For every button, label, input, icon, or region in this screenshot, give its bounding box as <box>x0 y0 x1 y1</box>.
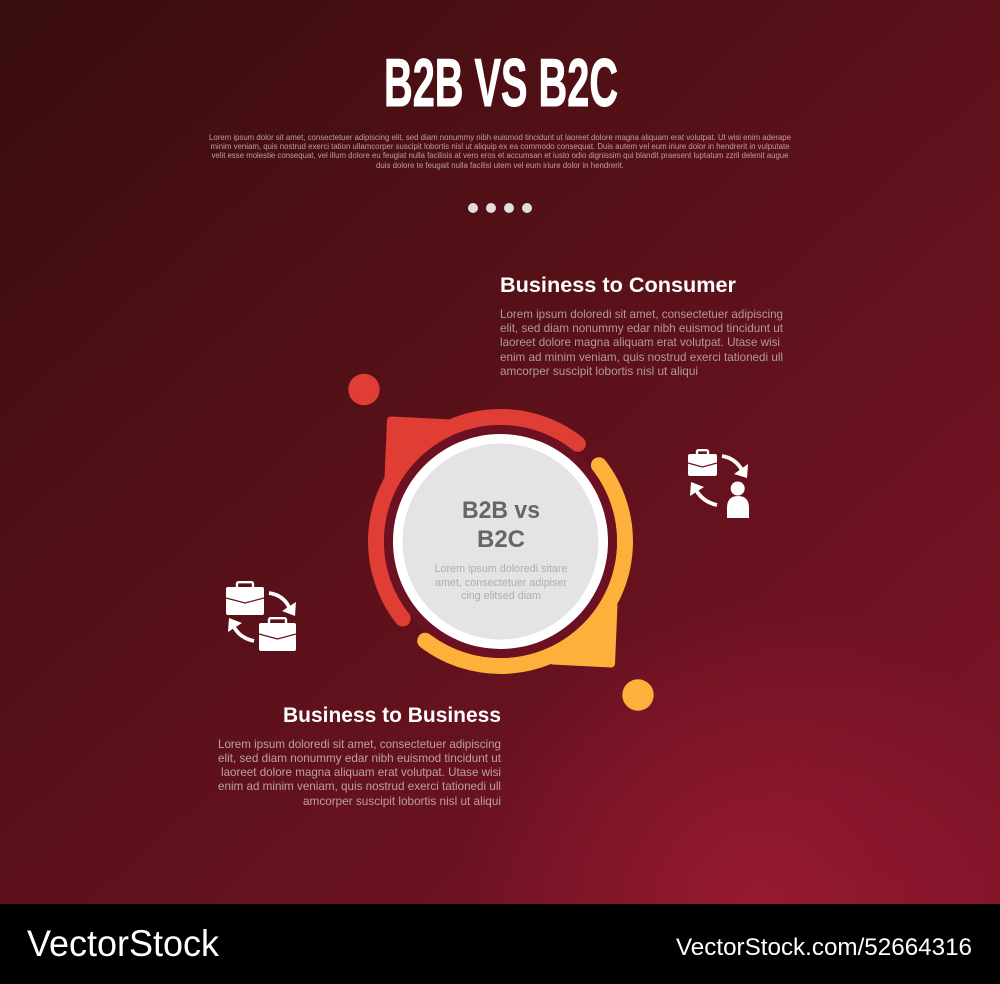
text block: business to business: Lorem ipsum doloredi sit amet, consectetuer adipiscing <box>218 738 501 751</box>
centre description: Lorem ipsum doloredi sitare <box>434 563 568 575</box>
icon: business to consumer <box>688 450 749 518</box>
red corner pointer <box>385 417 452 478</box>
white ring <box>393 434 608 649</box>
text block: business to business: laoreet dolore magna aliquam erat volutpat. Utase wisi <box>221 766 501 779</box>
text block: business to business: amcorper suscipit lobortis nisl ut aliqui <box>303 795 501 808</box>
briefcase two <box>259 618 296 651</box>
red arc <box>376 417 578 618</box>
intro text block: velit esse molestie consequat, vel illum dolore eu feugiat nulla facilisis at vero eros et accumsan et iusto odio dignissim qui blandit praesent luptatum zzril delenit augue <box>212 151 789 160</box>
text block: business to business: enim ad minim veniam, quis nostrud exerci tationedi ull <box>218 780 501 793</box>
orange arc <box>425 465 625 666</box>
text block: business to consumer: amcorper suscipit lobortis nisl ut aliqui <box>500 365 698 378</box>
intro text block <box>209 133 792 170</box>
intro text block: minim veniam, quis nostrud exerci tation ullamcorper suscipit lobortis nisl ut aliquip ex ea commodo consequat. Duis autem vel eum iriure dolor in hendrerit in vulputate <box>210 142 790 151</box>
arrow to business <box>690 482 717 505</box>
central diagram <box>348 374 654 711</box>
centre description: cing elitsed diam <box>461 590 541 602</box>
centre description <box>434 563 568 602</box>
text block: business to consumer: enim ad minim veniam, quis nostrud exerci tationedi ull <box>500 351 783 364</box>
maroon gap ring <box>384 425 617 658</box>
heading: business to consumer: Business to Consumer <box>500 274 736 297</box>
icon: business to business <box>226 582 296 651</box>
orange corner pointer <box>552 605 617 667</box>
text block: business to consumer: laoreet dolore magna aliquam erat volutpat. Utase wisi <box>500 336 780 349</box>
centre heading: B2B vs <box>462 497 540 524</box>
footer bar <box>0 904 1000 984</box>
centre heading: B2C <box>477 526 525 553</box>
arrow to consumer <box>722 456 748 478</box>
footer logo text: VectorStock <box>27 923 219 964</box>
intro text block: Lorem ipsum dolor sit amet, consectetuer adipiscing elit, sed diam nonummy nibh euismod tincidunt ut laoreet dolore magna aliquam erat volutpat. Ut wisi enim aderape <box>209 133 792 142</box>
title: B2B VS B2C <box>384 45 618 121</box>
arrow top <box>269 593 296 616</box>
arrow bottom <box>228 618 254 641</box>
text block: business to business <box>218 738 502 808</box>
grey centre disc <box>402 444 598 640</box>
text block: business to consumer <box>500 308 784 378</box>
pagination dots <box>468 203 532 213</box>
text block: business to business: elit, sed diam nonummy edar nibh euismod tincidunt ut <box>218 752 502 765</box>
footer image id: VectorStock.com/52664316 <box>676 934 972 961</box>
red decorative dot <box>348 374 380 405</box>
heading: business to business: Business to Business <box>283 704 501 727</box>
text block: business to consumer: elit, sed diam nonummy edar nibh euismod tincidunt ut <box>500 322 784 335</box>
centre description: amet, consectetuer adipiser <box>435 577 567 589</box>
consumer person <box>727 482 749 518</box>
briefcase one <box>226 582 264 615</box>
orange decorative dot <box>622 679 654 711</box>
centre heading <box>462 497 540 553</box>
intro text block: duis dolore te feugait nulla facilisi utem vel eum iriure dolor in hendrerit. <box>376 161 624 170</box>
text block: business to consumer: Lorem ipsum doloredi sit amet, consectetuer adipiscing <box>500 308 783 321</box>
briefcase <box>688 450 717 476</box>
